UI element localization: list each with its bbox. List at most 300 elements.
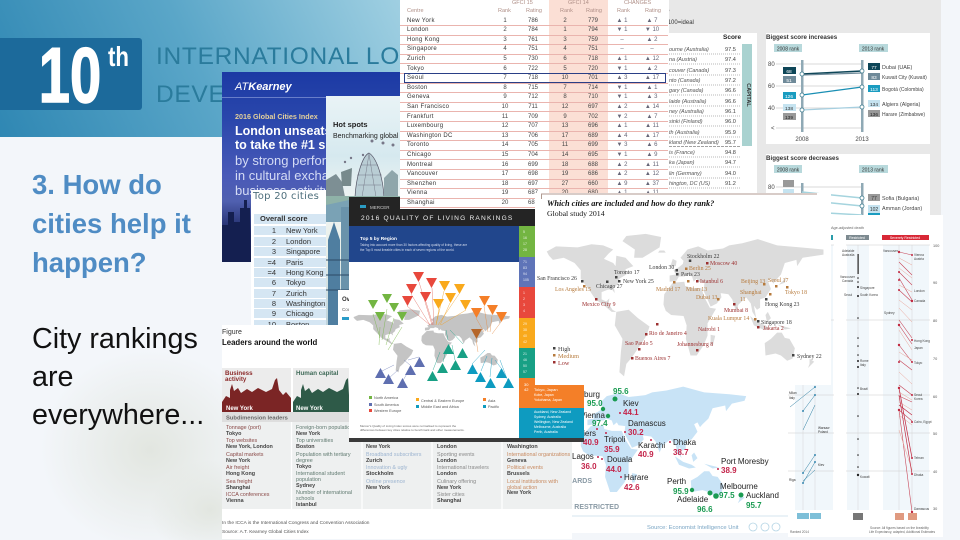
heading: Global study 2014 bbox=[547, 209, 605, 218]
table rows: 7 bbox=[563, 85, 567, 91]
side columns: regional lists: 30 bbox=[524, 382, 529, 387]
table rows: 685 bbox=[528, 200, 538, 206]
text: City rankings are everywhere...: everywhere... bbox=[32, 399, 204, 431]
city names: Lagos bbox=[572, 452, 594, 461]
table rows: 1 bbox=[563, 27, 567, 33]
table: subdimension leaders: Number of international bbox=[296, 490, 352, 496]
side columns: regional lists bbox=[519, 226, 584, 438]
table header: Rating bbox=[586, 8, 602, 14]
table rows: 3 bbox=[503, 37, 507, 43]
source note: Source: Economist Intelligence Unit bbox=[647, 525, 739, 531]
illustration: gherkin and city bbox=[326, 140, 402, 336]
table: subdimension leaders: Washington bbox=[507, 444, 538, 450]
side columns: regional lists: Yokohama, Japan bbox=[534, 398, 562, 402]
table rows: 688 bbox=[588, 162, 598, 168]
city labels: low: Mumbai 8 bbox=[724, 308, 748, 314]
table: subdimension leaders: Culinary offering bbox=[437, 479, 476, 485]
table rows: 730 bbox=[528, 56, 538, 62]
world map bbox=[547, 234, 823, 376]
table rows: Shenzhen bbox=[407, 181, 436, 187]
side columns: regional lists: 57 bbox=[523, 370, 527, 374]
city labels: high: London 30 bbox=[649, 265, 674, 271]
column: restricted dots: Seoul bbox=[844, 293, 852, 297]
panel: Hot spots report cover: Ov bbox=[342, 297, 351, 303]
side columns: regional lists: 1 bbox=[523, 291, 525, 295]
side columns: regional lists: 21 bbox=[523, 352, 527, 356]
table rows: ▲ 11 bbox=[645, 123, 659, 129]
table rows: ▲ 2 bbox=[617, 162, 627, 168]
panel: which cities are included map bbox=[535, 193, 831, 385]
column: restricted dots: Australia bbox=[842, 253, 855, 257]
table: subdimension leaders: International organizations bbox=[507, 452, 571, 458]
table rows: ▲ 1 bbox=[617, 18, 627, 24]
side columns: regional lists: Melbourne, Australia bbox=[534, 425, 566, 429]
table: subdimension leaders: International travelers bbox=[437, 465, 489, 471]
city labels: low: Johannesburg 8 bbox=[677, 342, 713, 348]
liveability table: laide (Australia) bbox=[669, 99, 707, 105]
heading: 3. How do cities help it happen?: 3. How do bbox=[32, 169, 162, 200]
panel: Hot spots report cover bbox=[326, 96, 406, 336]
column: severely restricted slope lines: Damascus bbox=[914, 507, 929, 511]
table rows: – bbox=[620, 37, 624, 43]
table rows: 702 bbox=[588, 114, 598, 120]
table rows: Seoul bbox=[407, 75, 424, 81]
table rows: Vancouver bbox=[407, 171, 438, 177]
table rows: ▼ 10 bbox=[645, 27, 659, 33]
city labels: high bbox=[537, 254, 822, 360]
red scores: 36.0 bbox=[581, 462, 597, 471]
city labels: low bbox=[582, 261, 784, 362]
table rows: 720 bbox=[588, 66, 598, 72]
side columns: regional lists: 83 bbox=[523, 266, 527, 270]
city labels: medium: Seoul 17 bbox=[768, 278, 789, 284]
table: subdimension leaders: London bbox=[437, 471, 457, 477]
side columns: regional lists: 38 bbox=[523, 328, 527, 332]
table rows: 15 bbox=[502, 152, 508, 158]
table rows: ▲ 11 bbox=[645, 190, 659, 196]
city labels: high: Toronto 17 bbox=[614, 270, 640, 276]
table rows: 707 bbox=[528, 123, 538, 129]
panel: EIU liveability map bbox=[572, 385, 790, 533]
pale bands bbox=[795, 245, 929, 510]
table: subdimension leaders: New York bbox=[437, 485, 461, 491]
AT Kearney logo: ATKearney bbox=[234, 81, 293, 93]
table rows: 712 bbox=[528, 94, 538, 100]
table rows: ▼ 2 bbox=[617, 114, 627, 120]
table rows: 11 bbox=[562, 142, 568, 148]
axis labels: 70 bbox=[933, 357, 937, 361]
column: severely restricted slope lines: Vancouver bbox=[883, 249, 899, 253]
rankings list: =4 bbox=[267, 268, 276, 277]
table rows: ▲ 17 bbox=[645, 75, 659, 81]
table rows: ▲ 37 bbox=[645, 181, 659, 187]
table rows: 2 bbox=[503, 27, 507, 33]
column: blue slope lines: Warsaw bbox=[818, 426, 830, 430]
city labels: medium: Milan 13 bbox=[686, 287, 707, 293]
side columns: regional lists: 4 bbox=[523, 309, 525, 313]
liveability table: 97.3 bbox=[725, 68, 736, 74]
rankings list: 2 bbox=[272, 236, 276, 246]
column: severely restricted slope lines: Sydney bbox=[884, 311, 895, 315]
report kicker: 2016 Global Cities Index bbox=[235, 112, 318, 121]
axis labels: 80 bbox=[933, 319, 937, 323]
table: subdimension leaders: New York bbox=[366, 444, 390, 450]
footnote: Mercer's Quality of Living Index scores were normalised to represent the bbox=[360, 424, 456, 428]
axis labels: 60 bbox=[933, 395, 937, 399]
legend: Asia bbox=[488, 399, 496, 403]
city labels: low: Sao Paulo 5 bbox=[625, 341, 653, 347]
table rows: 704 bbox=[528, 152, 538, 158]
badge: 10th: th bbox=[108, 41, 129, 72]
city names: Karachi bbox=[638, 441, 665, 450]
table rows: Singapore bbox=[407, 46, 437, 52]
chart: biggest score increases: 113 bbox=[870, 87, 878, 93]
table rows: 19 bbox=[562, 171, 568, 177]
green scores: 95.7 bbox=[746, 501, 762, 510]
chart: biggest score decreases: 77 bbox=[871, 196, 877, 202]
chart: biggest score increases: 68 bbox=[786, 69, 792, 75]
chart: biggest score decreases: 80 bbox=[768, 185, 775, 191]
chart: biggest score increases: 2013 bbox=[855, 137, 869, 143]
table: subdimension leaders: New York bbox=[226, 458, 250, 464]
column: severely restricted slope lines: Korea bbox=[914, 397, 923, 401]
table rows: 701 bbox=[588, 75, 598, 81]
liveability table: 96.6 bbox=[725, 99, 736, 105]
table header: Rank bbox=[560, 8, 573, 14]
city labels: low: Buenos Aires 7 bbox=[635, 356, 671, 362]
table rows: Montreal bbox=[407, 162, 433, 168]
column: human capital: Human capital bbox=[296, 370, 339, 377]
side columns: regional lists: Kobe, Japan bbox=[534, 393, 554, 397]
table: subdimension leaders: Sydney bbox=[296, 483, 315, 489]
column: business activity bbox=[222, 368, 291, 412]
report headline bbox=[235, 124, 346, 152]
green scores: 95.9 bbox=[673, 487, 689, 496]
report headline: to take the #1 spot bbox=[235, 138, 346, 152]
rankings list: 8 bbox=[272, 299, 276, 308]
chart: biggest score decreases: 2013 rank bbox=[862, 168, 885, 174]
table rows: 5 bbox=[503, 56, 507, 62]
column: severely restricted slope lines: Vienna bbox=[914, 253, 924, 257]
table: subdimension leaders bbox=[222, 422, 572, 509]
heading: Leaders around the world bbox=[222, 329, 318, 347]
table header: Rating bbox=[526, 8, 542, 14]
table: subdimension leaders: Capital markets bbox=[226, 452, 264, 458]
table rows: 9 bbox=[503, 94, 507, 100]
column: severely restricted slope lines: London bbox=[914, 289, 925, 293]
table rows: 722 bbox=[528, 66, 538, 72]
chart: biggest score increases: 2013 rank bbox=[862, 46, 885, 52]
subdimension leaders band: Subdimension leaders bbox=[226, 416, 288, 422]
liveability table: ka (Japan) bbox=[669, 160, 695, 166]
table rows: 4 bbox=[563, 46, 567, 52]
column: severely restricted slope lines: Austria bbox=[914, 257, 924, 261]
liveability table: ney (Australia) bbox=[669, 109, 704, 115]
green scores: 96.6 bbox=[697, 505, 713, 514]
table rows: 16 bbox=[502, 162, 508, 168]
table rows: ▲ 9 bbox=[647, 152, 657, 158]
column headers bbox=[810, 235, 929, 240]
side columns: regional lists: 46 bbox=[523, 358, 527, 362]
chart: biggest score increases: 138 bbox=[785, 106, 793, 112]
panel: liveability index bbox=[669, 0, 941, 216]
city labels: medium: Dubai 13 bbox=[696, 295, 718, 301]
column: severely restricted slope lines: Cairo, Egypt bbox=[914, 420, 932, 424]
table: subdimension leaders: Tokyo bbox=[226, 431, 242, 437]
subdimension leaders band bbox=[222, 412, 572, 422]
rankings list: Chicago bbox=[286, 309, 314, 318]
rankings list: Paris bbox=[286, 258, 303, 266]
heading: Leaders around the world: Leaders around the world bbox=[222, 338, 318, 347]
column: blue slope lines: Milan bbox=[789, 391, 797, 395]
table rows: 1 bbox=[503, 18, 507, 24]
source note bbox=[790, 526, 935, 534]
table rows: ▲ 7 bbox=[647, 200, 657, 206]
table rows: Zurich bbox=[407, 56, 425, 62]
panel: slope chart of liveability scores: Age-adjusted death bbox=[831, 226, 864, 230]
rankings list bbox=[254, 214, 326, 326]
markers: red Western Europe bbox=[402, 272, 437, 325]
table rows: ▼ 1 bbox=[617, 27, 627, 33]
table rows: – bbox=[620, 46, 624, 52]
side columns: regional lists: 17 bbox=[523, 242, 527, 246]
column: severely restricted slope lines: Dhaka bbox=[914, 473, 923, 477]
red scores: 35.9 bbox=[604, 445, 620, 454]
header: 2016 quality of living rankings: 2016 QUALITY OF LIVING RANKINGS bbox=[361, 215, 514, 222]
markers: teal Africa bbox=[427, 330, 468, 381]
city names: Kiev bbox=[623, 399, 639, 408]
city names: Vienna bbox=[580, 411, 606, 420]
table rows: 686 bbox=[588, 171, 598, 177]
column: restricted dots: Singapore bbox=[860, 286, 875, 290]
text: City rankings are everywhere...: City rankings bbox=[32, 323, 198, 355]
table rows: ▲ 3 bbox=[647, 94, 657, 100]
band: top 5 by region: Top 5 by Region bbox=[360, 236, 397, 242]
city labels: medium: Los Angeles 15 bbox=[555, 287, 591, 293]
table rows: ▲ 1 bbox=[617, 200, 627, 206]
source note: Life Expectancy, adapted, Additional Estimates bbox=[869, 530, 935, 534]
table rows: 784 bbox=[528, 27, 538, 33]
table: subdimension leaders: International student bbox=[296, 471, 345, 477]
table rows: 689 bbox=[588, 133, 598, 139]
column: severely restricted slope lines: Tokyo bbox=[914, 361, 923, 365]
rankings list: Tokyo bbox=[286, 278, 306, 287]
chart: biggest score increases: Harare (Zimbabwe) bbox=[882, 112, 925, 118]
column: severely restricted slope lines: Tehran bbox=[914, 456, 924, 460]
city labels: medium: 11 bbox=[740, 297, 746, 303]
side columns: regional lists: 5 bbox=[523, 230, 525, 234]
liveability table: 95.9 bbox=[725, 130, 736, 136]
rankings list: Hong Kong bbox=[286, 268, 324, 277]
table rows: 680 bbox=[588, 190, 598, 196]
rankings list: 7 bbox=[272, 288, 276, 298]
legend: Middle East and Africa bbox=[421, 405, 460, 409]
icon: skyline bbox=[222, 200, 250, 262]
table rows: 698 bbox=[528, 171, 538, 177]
markers: blue Pacific bbox=[467, 350, 514, 388]
table rows: 718 bbox=[588, 56, 598, 62]
table rows: ▲ 7 bbox=[647, 114, 657, 120]
column: restricted dots: Rome bbox=[860, 359, 869, 363]
table rows: 751 bbox=[588, 46, 598, 52]
city labels: low: Moscow 40 bbox=[710, 261, 737, 267]
column: human capital bbox=[293, 368, 363, 412]
markers: red low scores bbox=[596, 412, 719, 478]
city labels: high: Paris 23 bbox=[681, 272, 700, 278]
city labels: low: Mexico City 9 bbox=[582, 302, 616, 308]
city labels: low: Nairobi 1 bbox=[698, 327, 720, 333]
table header: GFCI 14 bbox=[568, 0, 589, 6]
table: subdimension leaders: Shanghai bbox=[226, 485, 251, 491]
city labels: medium: Kuala Lumpur 14 bbox=[708, 316, 749, 322]
city labels: medium bbox=[555, 266, 807, 322]
axis labels bbox=[933, 244, 939, 511]
chart: biggest score increases: Biggest score increases bbox=[766, 34, 838, 41]
table rows: ▲ 12 bbox=[645, 171, 659, 177]
city labels: low: Istanbul 6 bbox=[700, 279, 723, 285]
side columns: regional lists: 3 bbox=[523, 303, 525, 307]
table rows: 11 bbox=[502, 114, 508, 120]
table header: CHANGES bbox=[624, 0, 651, 6]
liveability table: lin (Germany) bbox=[669, 171, 702, 177]
city labels: high: New York 25 bbox=[623, 279, 654, 285]
table rows: London bbox=[407, 27, 429, 33]
year tags bbox=[797, 513, 917, 520]
chart: biggest score increases: Bogotá (Colombia) bbox=[882, 87, 924, 93]
side columns: regional lists: 2 bbox=[523, 297, 525, 301]
liveability table: 94.7 bbox=[725, 160, 736, 166]
table rows: ▲ 3 bbox=[617, 75, 627, 81]
markers: orange Asia bbox=[471, 296, 507, 352]
world map bbox=[581, 387, 746, 503]
column: blue slope lines: Riga bbox=[789, 478, 796, 482]
panel: top 20 cities bbox=[251, 190, 326, 326]
liveability table: gary (Canada) bbox=[669, 88, 704, 94]
city names: Harare bbox=[624, 473, 649, 482]
side columns: regional lists: 16 bbox=[523, 236, 527, 240]
column: restricted dots: South Korea bbox=[860, 293, 878, 297]
table rows: 20 bbox=[502, 200, 508, 206]
chart: biggest score increases: 51 bbox=[786, 78, 792, 84]
liveability table: 95.7 bbox=[725, 140, 736, 146]
table rows: Toronto bbox=[407, 142, 429, 148]
liveability table: 91.2 bbox=[725, 181, 736, 187]
table: subdimension leaders: Top websites bbox=[226, 438, 257, 444]
table rows: 678 bbox=[588, 200, 598, 206]
chart: biggest score decreases: Sofia (Bulgaria) bbox=[882, 196, 919, 202]
chart: biggest score increases: Kuwait City (Kuwait) bbox=[882, 75, 927, 81]
liveability table: Score bbox=[723, 34, 741, 41]
liveability table: sinki (Finland) bbox=[669, 119, 703, 125]
rankings list: 3 bbox=[272, 247, 276, 256]
rankings list: Overall score bbox=[260, 214, 308, 223]
table rows: ▲ 17 bbox=[645, 133, 659, 139]
footnotes: In the ICCA is the International Congress and Convention Association bbox=[222, 520, 370, 526]
city labels: high: San Francisco 26 bbox=[537, 276, 577, 282]
city names: Melbourne bbox=[720, 482, 758, 491]
legend: Low bbox=[558, 360, 570, 367]
chart: biggest score decreases: Biggest score decreases bbox=[766, 155, 839, 162]
heading: 3. How do cities help it happen?: happen? bbox=[32, 247, 147, 278]
table rows: Boston bbox=[407, 85, 427, 91]
city labels: high: Chicago 27 bbox=[596, 284, 623, 290]
report title: Benchmarking global bbox=[333, 133, 399, 140]
heading: 3. How do cities help it happen? bbox=[32, 169, 191, 278]
table rows: 5 bbox=[563, 66, 567, 72]
table rows: 6 bbox=[563, 56, 567, 62]
table rows: 27 bbox=[562, 181, 568, 187]
table rows: ▲ 1 bbox=[647, 85, 657, 91]
chart: biggest score increases: 134 bbox=[870, 102, 878, 108]
liveability table: 97.2 bbox=[725, 78, 736, 84]
city labels: high: Sydney 22 bbox=[797, 354, 822, 360]
table: subdimension leaders: Sister cities bbox=[437, 492, 465, 498]
table rows: 10 bbox=[562, 75, 568, 81]
city labels: medium: Shanghai bbox=[740, 290, 762, 296]
city names: Douala bbox=[607, 455, 633, 464]
green scores: 95.6 bbox=[613, 387, 629, 396]
table rows: ▲ 9 bbox=[617, 181, 627, 187]
rankings list: Washington bbox=[286, 299, 325, 308]
side columns: regional lists: 94 bbox=[523, 272, 527, 276]
report subhead: in cultural exchange bbox=[235, 168, 351, 183]
table rows: ▲ 2 bbox=[647, 66, 657, 72]
liveability table: 96.1 bbox=[725, 109, 736, 115]
table rows: 7 bbox=[503, 75, 507, 81]
table: subdimension leaders: New York bbox=[296, 431, 320, 437]
table rows: 710 bbox=[588, 94, 598, 100]
column: restricted dots bbox=[840, 249, 878, 479]
heading bbox=[547, 199, 714, 218]
table rows: 695 bbox=[588, 152, 598, 158]
side columns: regional lists: Perth, Australia bbox=[534, 430, 558, 434]
table rows: ▲ 7 bbox=[647, 18, 657, 24]
city labels: medium: Berlin 25 bbox=[689, 266, 711, 272]
markers: high ranking cities bbox=[581, 260, 794, 356]
table rows: 8 bbox=[503, 85, 507, 91]
markers: blue South America bbox=[375, 357, 425, 388]
green scores bbox=[587, 387, 762, 514]
city names: Adelaide bbox=[677, 495, 709, 504]
chart: biggest score increases: 60 bbox=[768, 84, 775, 90]
rankings list: 1 bbox=[272, 226, 276, 235]
markers: medium ranking cities bbox=[583, 268, 788, 320]
table rows: Luxembourg bbox=[407, 123, 443, 129]
report title bbox=[333, 120, 399, 140]
panel: AT Kearney global cities index bbox=[222, 72, 402, 262]
column: human capital: New York bbox=[296, 406, 323, 412]
table rows: ▼ 1 bbox=[617, 94, 627, 100]
footnotes bbox=[222, 520, 370, 535]
table rows: Washington DC bbox=[407, 133, 453, 139]
table rows: Chicago bbox=[407, 152, 431, 158]
markers: low ranking cities bbox=[595, 262, 760, 360]
liveability table: 94.0 bbox=[725, 171, 736, 177]
column: blue slope lines bbox=[789, 386, 830, 484]
city names: Perth bbox=[667, 477, 686, 486]
column: severely restricted slope lines: Seoul bbox=[914, 393, 922, 397]
heading: Which cities are included and how do they rank? bbox=[547, 199, 714, 208]
table rows: San Francisco bbox=[407, 104, 449, 110]
table rows: Frankfurt bbox=[407, 114, 434, 120]
chart: biggest score increases: Dubai (UAE) bbox=[882, 65, 912, 71]
legend: Central & Eastern Europe bbox=[421, 399, 464, 403]
table: subdimension leaders: Zurich bbox=[366, 458, 382, 464]
table: subdimension leaders: Top universities bbox=[296, 438, 333, 444]
city labels: medium: Beijing 13 bbox=[741, 279, 765, 285]
side columns: regional lists: Auckland, New Zealand bbox=[534, 410, 571, 414]
city names: Algiers bbox=[572, 429, 596, 438]
